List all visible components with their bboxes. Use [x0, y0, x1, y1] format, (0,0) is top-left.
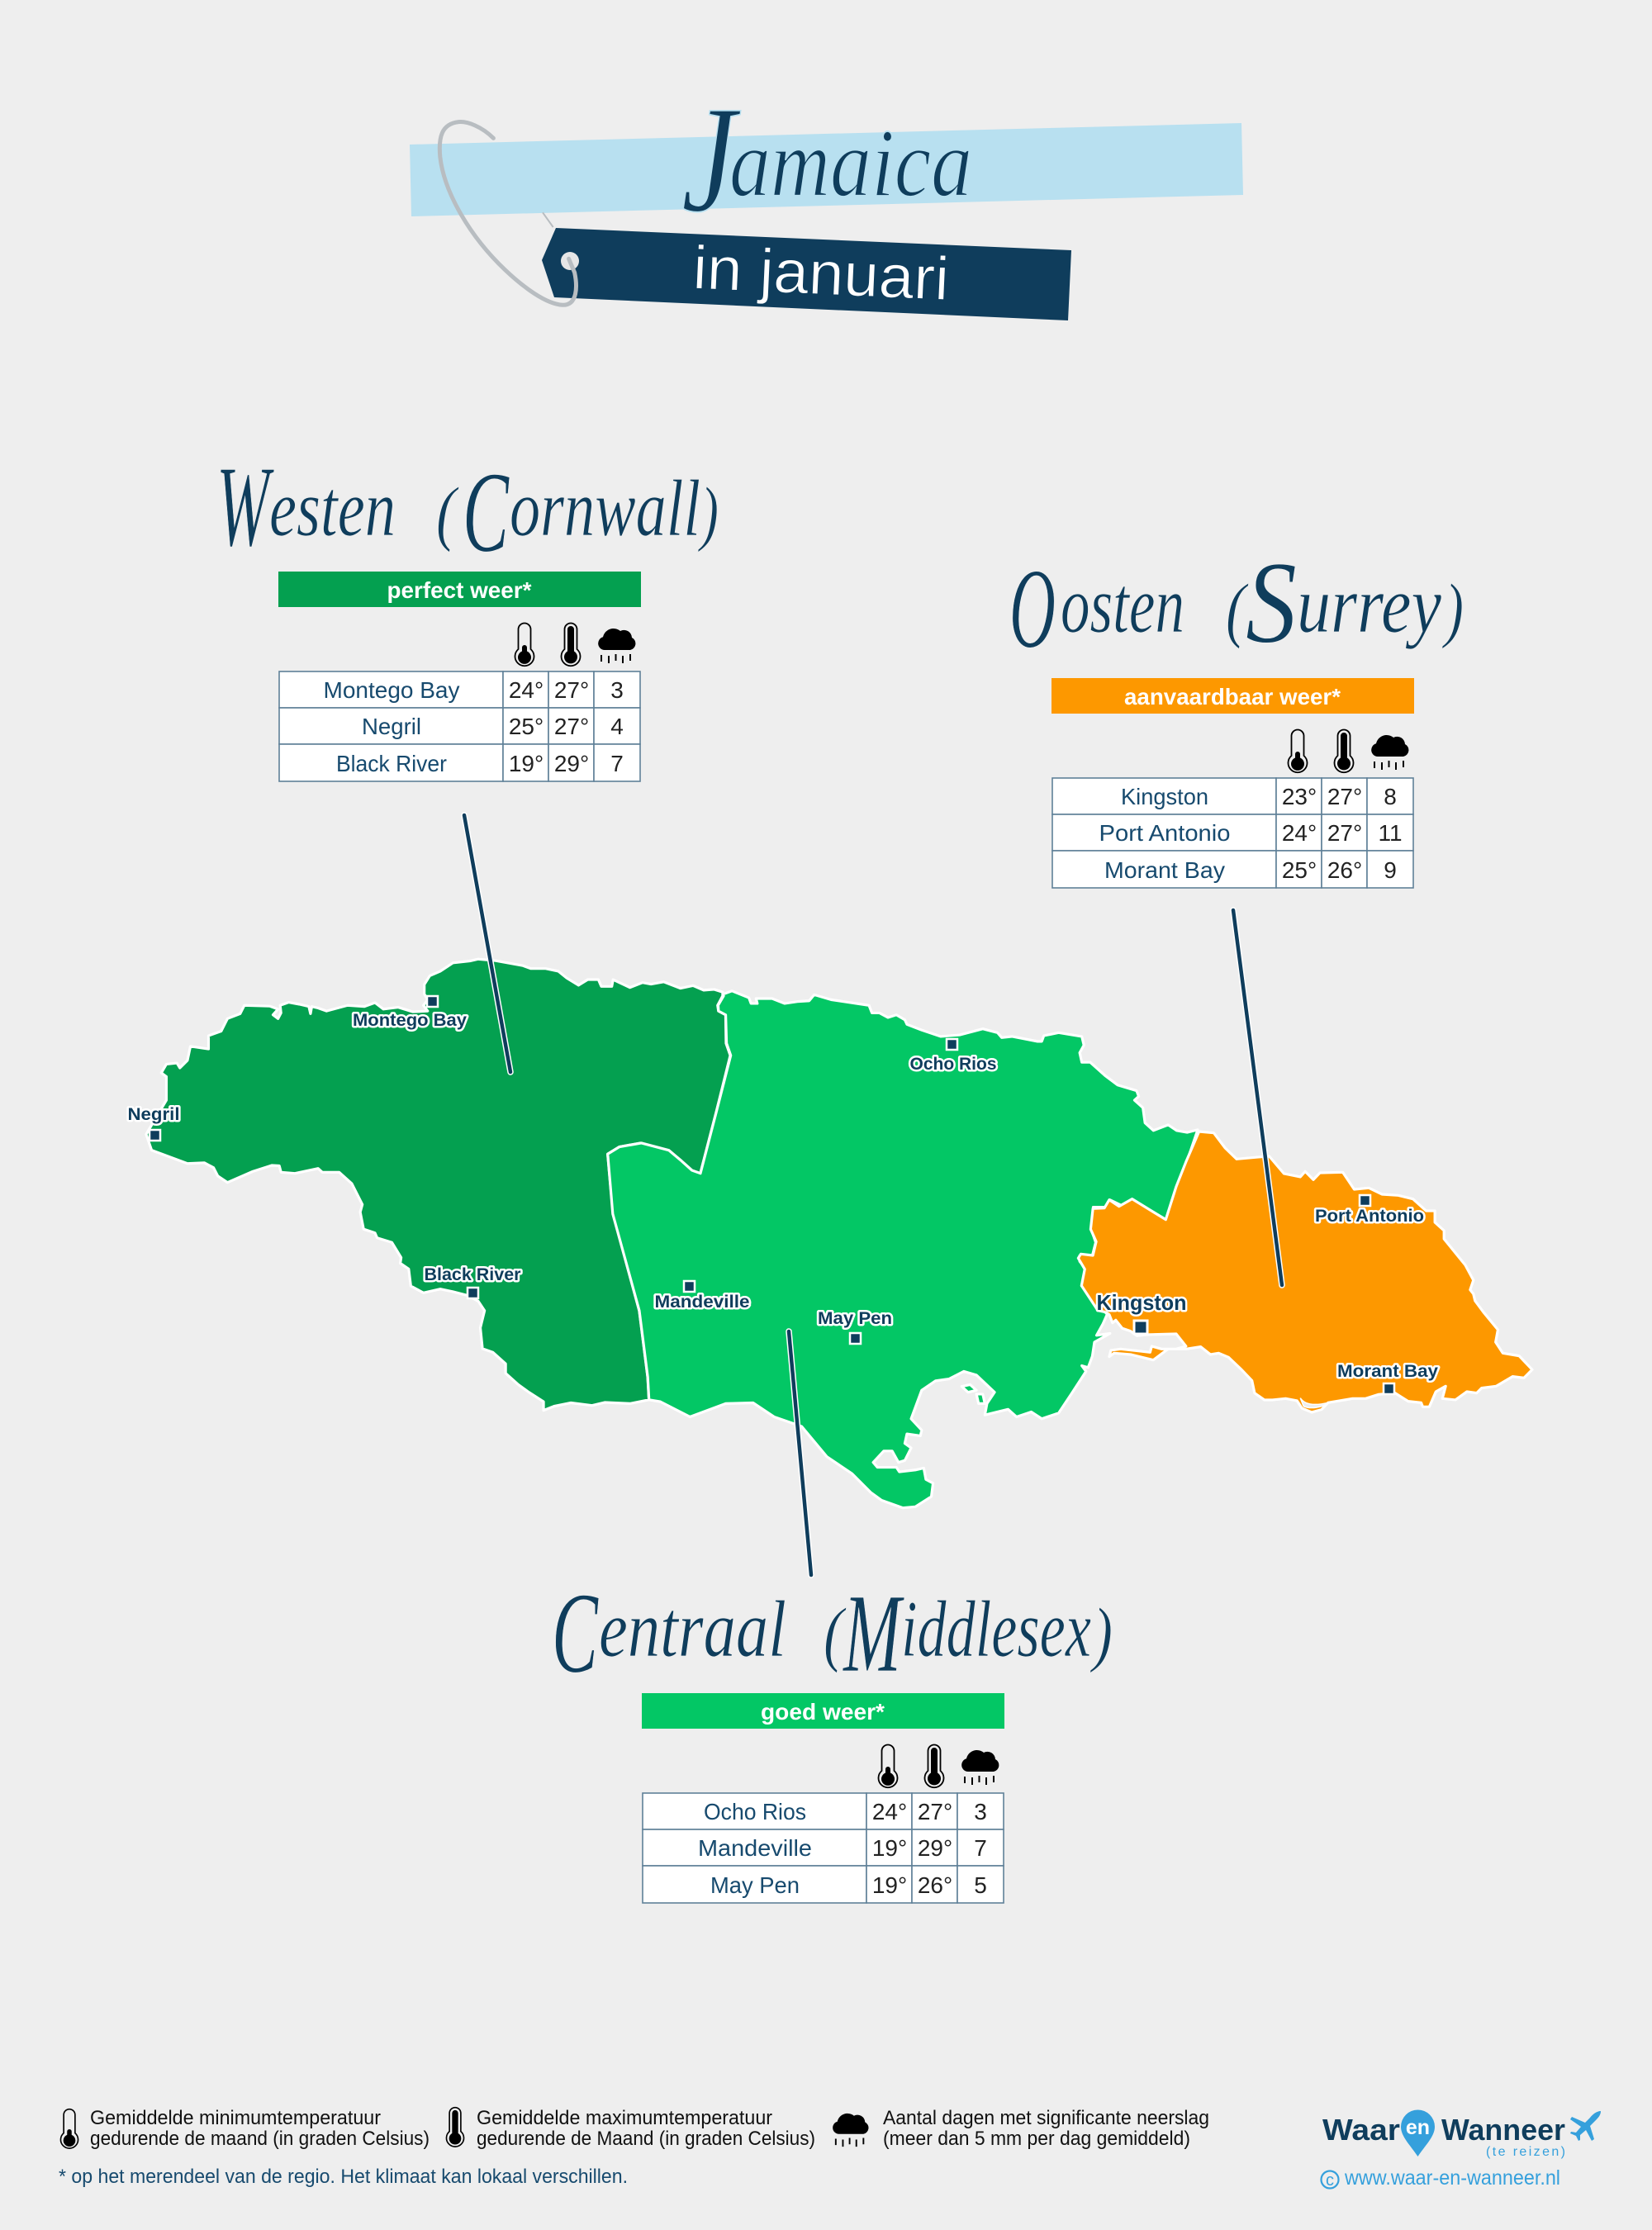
climate table: 25° [509, 714, 544, 739]
panel: east [1051, 678, 1414, 888]
legend: maximum temperature: gedurende de Maand (in graden Celsius) [477, 2128, 815, 2150]
panel: west [278, 572, 641, 781]
legend: minimum temperature [60, 2107, 430, 2150]
climate table: 23° [1282, 784, 1317, 809]
heading: Oosten (Surrey): osten [1061, 561, 1184, 650]
panel: central [642, 1693, 1004, 1903]
city: Morant Bay: Morant Bay [1337, 1362, 1438, 1381]
heading: Centraal (Middlesex): M [843, 1572, 904, 1696]
climate table: 27° [554, 714, 589, 739]
legend: precipitation [833, 2107, 1209, 2150]
climate table: 27° [1327, 820, 1362, 846]
city: Negril: Negril [127, 1105, 180, 1124]
city: Ocho Rios [910, 1039, 996, 1074]
climate table: 3 [974, 1799, 987, 1824]
city: Kingston [1097, 1290, 1186, 1334]
climate table: 3 [610, 677, 624, 703]
climate table: Port Antonio [1099, 820, 1231, 846]
city: Port Antonio [1315, 1195, 1424, 1226]
climate table: May Pen [710, 1872, 800, 1898]
footnote: * op het merendeel van de regio. Het klimaat kan lokaal verschillen. [59, 2166, 628, 2188]
rating bar [642, 1693, 1004, 1729]
climate table: 19° [872, 1835, 907, 1861]
climate table: 7 [610, 751, 624, 776]
legend: minimum temperature: Gemiddelde minimumtemperatuur [90, 2107, 381, 2129]
city: Negril [127, 1105, 180, 1141]
heading: Oosten (Surrey): ) [1441, 570, 1464, 650]
logo: Waar en Wanneer: en [1406, 2116, 1430, 2139]
legend [60, 2107, 1209, 2150]
region: east [1078, 1132, 1532, 1412]
climate table: Mandeville [698, 1835, 812, 1861]
city: Black River: Black River [425, 1265, 520, 1284]
heading: Centraal (Middlesex): ( [824, 1594, 847, 1674]
climate table: 27° [918, 1799, 952, 1824]
rating bar [1051, 678, 1414, 714]
city: May Pen: May Pen [818, 1309, 892, 1328]
climate table: 27° [554, 677, 589, 703]
heading: Centraal (Middlesex): C [552, 1569, 599, 1697]
climate table: 24° [509, 677, 544, 703]
heading: Westen (Cornwall): C [463, 448, 510, 576]
tag string [439, 122, 576, 305]
city: Montego Bay [353, 996, 467, 1030]
heading: Westen (Cornwall): ( [436, 473, 459, 553]
column icons [515, 623, 635, 666]
website credit: www.waar-en-wanneer.nl [1344, 2166, 1560, 2190]
heading: Centraal (Middlesex): entraal [599, 1585, 786, 1674]
logo: Waar en Wanneer: Waar [1322, 2113, 1400, 2147]
region: west [146, 959, 730, 1411]
logo: Waar en Wanneer: Wanneer [1441, 2113, 1565, 2147]
rating bar [278, 572, 641, 607]
climate table: Ocho Rios [704, 1799, 806, 1824]
leader line: east [1233, 910, 1282, 1285]
climate table: 29° [918, 1835, 952, 1861]
heading: Oosten (Surrey): urrey [1297, 561, 1441, 650]
luggage tag [542, 228, 1071, 320]
leader line: west [464, 815, 510, 1072]
rating bar: aanvaardbaar weer* [1124, 684, 1341, 709]
climate table: 9 [1384, 857, 1397, 883]
website credit: c [1326, 2171, 1334, 2190]
climate table: 25° [1282, 857, 1317, 883]
climate table [279, 671, 640, 781]
heading: Oosten (Surrey): O [1009, 545, 1056, 671]
column icons [879, 1744, 999, 1787]
climate table: 24° [872, 1799, 907, 1824]
map of Jamaica [127, 959, 1532, 1508]
climate table: 11 [1378, 820, 1403, 846]
title block [410, 75, 1243, 320]
city: Morant Bay [1337, 1362, 1438, 1394]
climate table: 29° [554, 751, 589, 776]
climate table: Montego Bay [324, 677, 459, 703]
logo: Waar en Wanneer [1322, 2109, 1601, 2159]
rating bar: perfect weer* [387, 577, 532, 603]
heading: Westen (Cornwall): W [216, 443, 274, 571]
climate table: 26° [1327, 857, 1362, 883]
heading: Westen (Cornwall): ornwall [510, 464, 700, 553]
climate table: 8 [1384, 784, 1397, 809]
climate table: 27° [1327, 784, 1362, 809]
heading: Centraal (Middlesex): ) [1089, 1594, 1113, 1674]
climate table: Negril [362, 714, 421, 739]
city: Ocho Rios: Ocho Rios [910, 1055, 996, 1074]
city: Mandeville: Mandeville [654, 1293, 750, 1312]
leader line: central [789, 1331, 811, 1575]
climate table: Morant Bay [1104, 857, 1225, 883]
city: Black River [425, 1265, 520, 1298]
title banner [410, 123, 1243, 216]
heading: Oosten (Surrey): S [1246, 537, 1297, 667]
climate table: 7 [974, 1835, 987, 1861]
city: Mandeville [654, 1281, 750, 1312]
climate table [1052, 778, 1413, 888]
legend: maximum temperature: Gemiddelde maximumtemperatuur [477, 2107, 772, 2129]
heading: Westen (Cornwall): esten [269, 464, 396, 553]
city: Kingston: Kingston [1097, 1290, 1186, 1315]
legend: precipitation: Aantal dagen met significante neerslag [883, 2107, 1209, 2129]
heading: Oosten (Surrey): ( [1226, 570, 1249, 650]
logo: Waar en Wanneer: (te reizen) [1486, 2145, 1565, 2159]
rating bar: goed weer* [761, 1699, 885, 1725]
climate table: 26° [918, 1872, 952, 1898]
climate table: 19° [509, 751, 544, 776]
title: Jamaica: J [681, 75, 741, 244]
legend: maximum temperature [446, 2107, 815, 2150]
subtitle: in januari [691, 233, 951, 313]
title: Jamaica: amaica [729, 109, 972, 217]
region: central [608, 991, 1198, 1508]
city: May Pen [818, 1309, 892, 1344]
column icons [1289, 730, 1408, 772]
city: Montego Bay: Montego Bay [353, 1011, 467, 1030]
climate table: Black River [336, 751, 447, 776]
climate table: Kingston [1121, 784, 1208, 809]
legend: minimum temperature: gedurende de maand (in graden Celsius) [90, 2128, 430, 2150]
climate table: 4 [610, 714, 624, 739]
climate table: 19° [872, 1872, 907, 1898]
climate table [643, 1793, 1004, 1903]
climate table: 5 [974, 1872, 987, 1898]
tag hole [561, 252, 579, 270]
climate table: 24° [1282, 820, 1317, 846]
heading: Centraal (Middlesex): iddlesex [901, 1585, 1091, 1674]
legend: precipitation: (meer dan 5 mm per dag gemiddeld) [883, 2128, 1190, 2150]
heading: Westen (Cornwall): ) [697, 473, 719, 553]
city: Port Antonio: Port Antonio [1315, 1207, 1424, 1226]
